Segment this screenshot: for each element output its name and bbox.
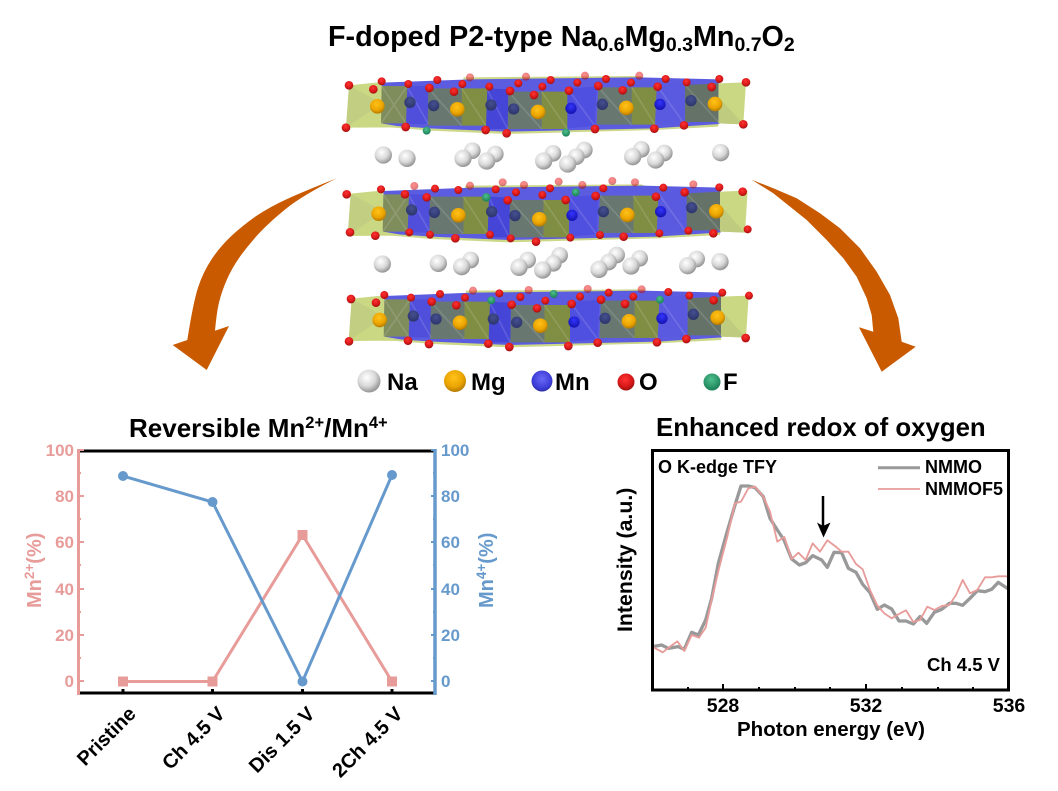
left axis title: (%) [24,533,46,564]
left axis title: 2+ [22,564,37,579]
right axis title: Mn [476,579,498,608]
spectrum: NMMO [652,486,1008,649]
right axis: 0 [441,672,450,691]
legend: O [618,369,658,396]
crystal layer 3 [345,285,753,351]
title: 0.6 [597,34,625,56]
legend: NMMOF5 [878,479,1003,499]
title: Mg [624,21,666,53]
chart heading: 2+ [305,414,324,432]
x axis labels [73,703,408,782]
left axis: 60 [55,533,74,552]
right axis: 80 [441,487,460,506]
legend: NMMO [878,457,982,477]
left axis: 80 [55,487,74,506]
x axis labels: Ch 4.5 V [158,703,230,774]
panel: O K-edge spectrum [613,414,1025,741]
chart heading: Reversible Mn [129,413,305,443]
state label: Ch 4.5 V [927,654,1001,675]
legend: Mg [444,369,506,396]
spectra [652,486,1008,652]
left axis: 20 [55,626,74,645]
legend: Mg: Mg [471,369,506,396]
legend: Na [358,369,418,396]
sodium layer 2 [374,247,729,279]
chart frame [78,451,436,693]
right axis [431,441,469,695]
x tick labels: 536 [993,695,1025,717]
arrow: left curved [173,178,337,370]
right axis title: 4+ [474,564,489,579]
right axis: 20 [441,626,460,645]
legend: O: O [639,369,658,396]
x axis labels: Dis 1.5 V [245,703,320,778]
x tick labels: 532 [850,695,882,717]
left axis [46,441,84,695]
right axis: 40 [441,580,460,599]
x tick labels [707,695,1025,717]
title: 0.7 [734,34,762,56]
spectrum: NMMOF5 [652,487,1008,652]
x axis labels: Pristine [73,703,141,770]
title: F-doped P2-type Na [328,21,597,53]
chart heading: /Mn [324,413,369,443]
legend: NMMO: NMMO [925,457,982,477]
x axis labels: 2Ch 4.5 V [328,703,408,782]
left axis: 40 [55,580,74,599]
chart heading: 4+ [369,414,388,432]
left axis: 0 [65,672,74,691]
legend: NMMOF5: NMMOF5 [925,479,1003,499]
panel: Mn valence chart [22,413,498,782]
series: Mn2+ [118,530,397,686]
title: 2 [784,34,795,56]
x axis title: Photon energy (eV) [737,718,925,741]
atom legend [358,369,738,396]
sodium layer 1 [375,141,729,173]
plot frame [652,450,1008,690]
chart heading: Enhanced redox of oxygen [656,414,986,442]
y axis title: Intensity (a.u.) [613,488,637,632]
crystal structure illustration [342,72,753,351]
legend: Na: Na [387,369,418,396]
legend: F [704,369,738,396]
series: Mn4+ [118,470,397,686]
title: 0.3 [666,34,693,56]
x tick labels: 528 [707,695,739,717]
right axis: 60 [441,533,460,552]
left axis title: Mn [24,579,46,608]
crystal layer 1 [342,72,750,138]
left axis: 100 [46,441,74,460]
right axis: 100 [441,441,469,460]
arrow: oxygen redox feature [817,496,830,538]
crystal layer 2 [342,177,752,246]
arrow: right curved [752,180,916,372]
title: O [762,21,784,53]
title: Mn [693,21,734,53]
edge label: O K-edge TFY [658,457,777,477]
legend: F: F [723,369,738,396]
legend: Mn: Mn [555,369,590,396]
right axis title: (%) [476,533,498,564]
legend: Mn [532,369,590,396]
